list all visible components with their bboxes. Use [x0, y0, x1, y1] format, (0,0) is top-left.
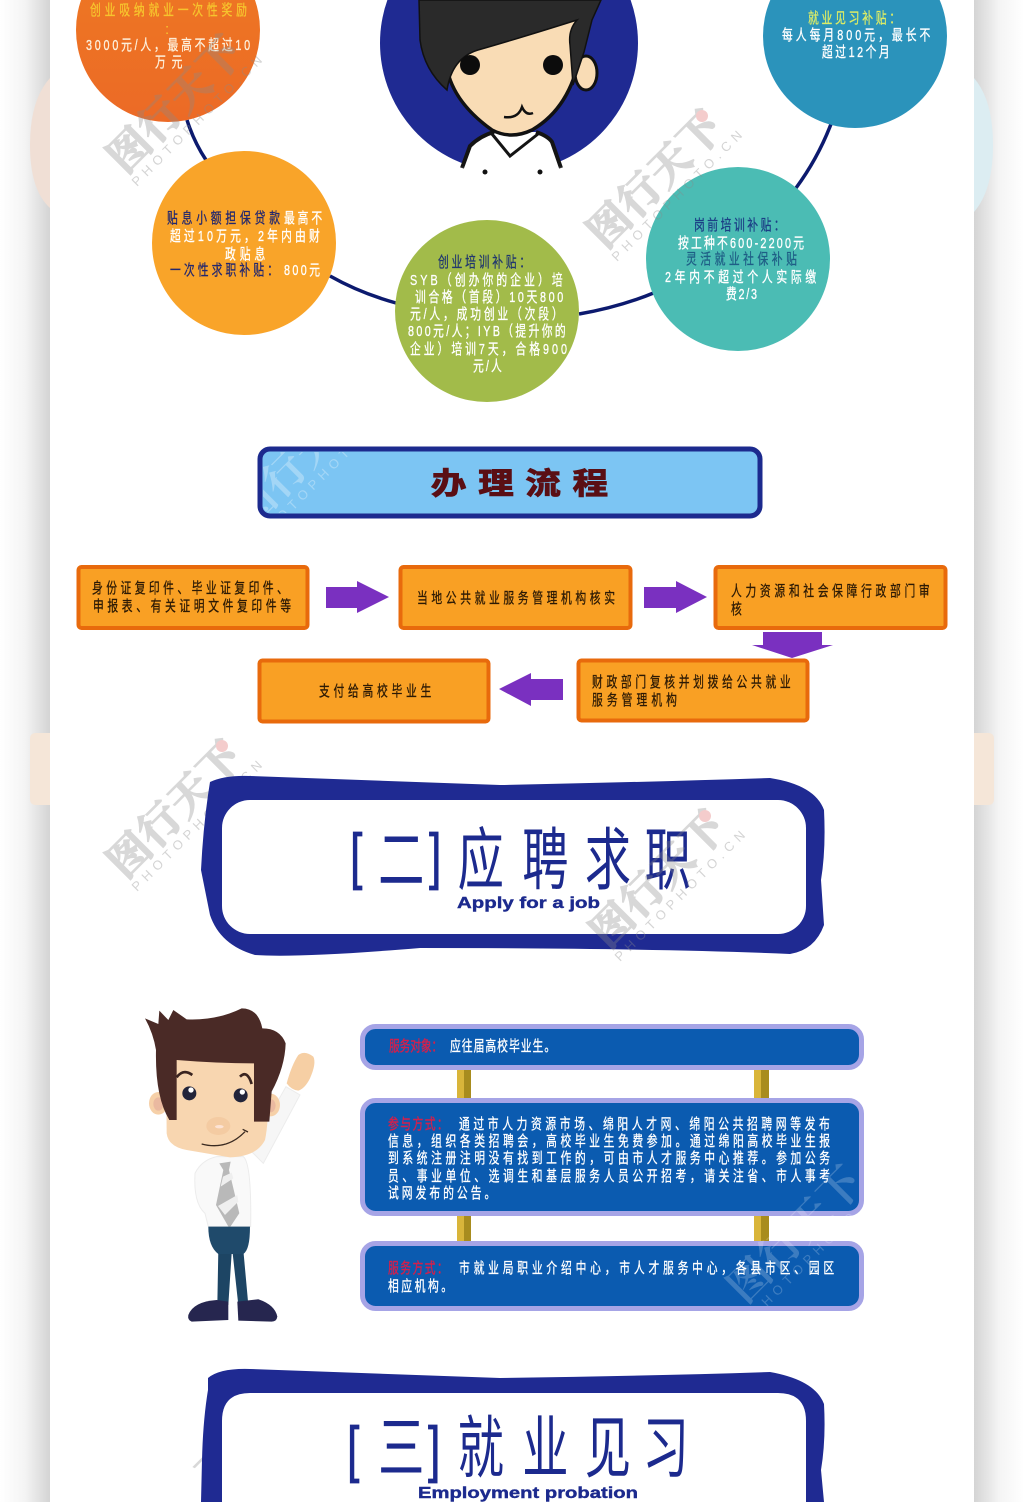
watermark: left of section two: PHOTOPHOTO.CN: [129, 758, 265, 894]
process box: human resources review: [716, 567, 946, 628]
circle: pre-job training subsidy: 费2/3: [726, 285, 757, 302]
watermark: over section two frame: PHOTOPHOTO.CN: [612, 828, 748, 964]
info panel: participation method: 到系统注册注明没有找到工作的，可由市人才服务中心推荐。参加公务: [388, 1149, 830, 1166]
arrow: step two to three: [644, 581, 707, 613]
section frame: apply for a job: 二应聘求职: [378, 823, 691, 899]
right side shadow with ghost shapes: [974, 0, 1024, 1502]
arrow: step four to five: [499, 673, 563, 706]
info panel: service target: 应往届高校毕业生。: [450, 1037, 555, 1054]
process box: payment: 支付给高校毕业生: [319, 682, 431, 699]
circle: entrepreneurship training subsidy: 训合格（首段）10天800: [415, 288, 563, 305]
process box: finance department: [578, 660, 808, 720]
info panel: participation method: 员、事业单位、选调生和基层服务人员公开招考，请关注省、市人事考: [388, 1167, 830, 1184]
info panel: service channels: 相应机构。: [388, 1277, 452, 1294]
circle: guaranteed loan and job-seeking subsidy: 一次性求职补贴：: [170, 261, 278, 278]
circle: entrepreneurship training subsidy: 创业培训补贴：: [438, 253, 530, 270]
section frame: employment probation: 三就业见习: [378, 1411, 689, 1487]
watermark: bottom left: 下: [182, 1426, 255, 1499]
process box: human resources review: 核: [731, 600, 742, 617]
watermark: upper middle: 图行天下: [572, 96, 735, 259]
watermark: over section two frame: 图行天下: [575, 796, 738, 959]
info panel: participation method: [362, 1100, 862, 1214]
process box: finance department: 财政部门复核并划拨给公共就业: [592, 673, 791, 690]
watermark: upper left: PHOTOPHOTO.CN: [129, 53, 265, 189]
circle: guaranteed loan and job-seeking subsidy: 贴息小额担保贷款: [167, 209, 280, 226]
section banner: process: 办理流程: [431, 467, 608, 500]
arrow: step one to two: [326, 581, 389, 613]
circle: one-time employment reward: 万元: [155, 53, 182, 70]
process box: documents: 申报表、有关证明文件复印件等: [93, 597, 291, 614]
circle: internship subsidy: 超过12个月: [822, 43, 890, 60]
connecting arc lines: [187, 120, 831, 314]
circle: one-time employment reward: [76, 0, 260, 122]
section frame: apply for a job: Apply for a job: [457, 895, 600, 912]
process box: verification: [400, 567, 630, 628]
section banner: process: [260, 449, 760, 516]
circle: pre-job training subsidy: 2年内不超过个人实际缴: [665, 268, 816, 285]
process box: payment: [260, 660, 488, 722]
circle: internship subsidy: [763, 0, 947, 128]
section frame: apply for a job: [201, 776, 825, 956]
process box: human resources review: 人力资源和社会保障行政部门审: [731, 582, 930, 599]
circle: one-time employment reward: 3000元/人，最高不超过10: [86, 36, 250, 53]
arrow: step three to four: [752, 632, 833, 658]
process box: documents: [78, 567, 308, 628]
section frame: employment probation: [201, 1369, 825, 1502]
circle: guaranteed loan and job-seeking subsidy: 政贴息: [225, 245, 265, 262]
circle: pre-job training subsidy: [646, 167, 830, 351]
left side shadow with ghost shapes: [0, 0, 50, 1502]
info panel: participation method: 信息，组织各类招聘会，高校毕业生免费参加。通过绵阳高校毕业生报: [388, 1132, 830, 1149]
info panel: service target: [362, 1026, 862, 1068]
watermark: over banner: PHOTOPHOTO.CN: [254, 408, 390, 544]
circle: pre-job training subsidy: 岗前培训补贴：: [694, 216, 785, 233]
watermark: over info panels: PHOTOPHOTO.CN: [749, 1183, 885, 1319]
circle: entrepreneurship training subsidy: SYB（创办你的企业）培: [410, 271, 563, 288]
watermark: upper left: 图行天下: [92, 21, 255, 184]
info panel: service target: 服务对象：: [389, 1037, 442, 1054]
info panel: service channels: 服务方式：: [388, 1259, 448, 1276]
info panel: service channels: [362, 1244, 862, 1308]
circle: entrepreneurship training subsidy: 企业）培训7天，合格900: [410, 340, 567, 357]
section frame: employment probation: [: [347, 1415, 359, 1484]
circle: entrepreneurship training subsidy: [395, 220, 579, 402]
icon: cartoon businessman waving: [145, 1008, 314, 1322]
connector posts between info panels: [457, 1067, 769, 1243]
info panel: service channels: 市就业局职业介绍中心，市人才服务中心，各县市区、园区: [459, 1259, 834, 1276]
circle: one-time employment reward: 创业吸纳就业一次性奖励: [90, 1, 247, 18]
process box: verification: 当地公共就业服务管理机构核实: [417, 589, 615, 606]
section frame: employment probation: ]: [428, 1415, 440, 1484]
watermark: left of section two: 图行天下: [92, 726, 255, 889]
info panel: participation method: 通过市人力资源市场、绵阳人才网、绵阳公共招聘网等发布: [459, 1115, 830, 1132]
circle: pre-job training subsidy: 按工种不600-2200元: [678, 234, 804, 251]
circle: entrepreneurship training subsidy: 元/人，成功创业（次段）: [410, 305, 563, 322]
circle: guaranteed loan and job-seeking subsidy: [152, 151, 336, 335]
process box: finance department: 服务管理机构: [592, 691, 677, 708]
circle: internship subsidy: 就业见习补贴：: [808, 9, 900, 26]
watermark: over info panels: 图行天下: [712, 1151, 875, 1314]
section frame: employment probation: Employment probation: [418, 1485, 638, 1502]
watermark: upper middle: PHOTOPHOTO.CN: [609, 128, 745, 264]
watermark: over banner: [263, 452, 348, 513]
circle: guaranteed loan and job-seeking subsidy: 最高不: [284, 209, 322, 226]
circle: pre-job training subsidy: 灵活就业社保补贴: [686, 250, 797, 267]
watermark: bottom left: .CN: [226, 1458, 265, 1497]
circle: guaranteed loan and job-seeking subsidy: 800元: [284, 261, 320, 278]
section frame: apply for a job: [: [350, 822, 362, 891]
circle: entrepreneurship training subsidy: 元/人: [473, 357, 502, 374]
process box: documents: 身份证复印件、毕业证复印件、: [92, 579, 288, 596]
watermark: over banner: 图行天下: [217, 376, 380, 539]
circle: guaranteed loan and job-seeking subsidy: 超过10万元，2年内由财: [170, 227, 320, 244]
info panel: participation method: 参与方式：: [388, 1115, 448, 1132]
icon: cartoon boy in navy circle: [380, 0, 638, 180]
info panel: participation method: 试网发布的公告。: [388, 1184, 495, 1201]
circle: entrepreneurship training subsidy: 800元/人；IYB（提升你的: [408, 322, 566, 341]
circle: one-time employment reward: :: [165, 21, 169, 38]
section frame: apply for a job: ]: [429, 822, 441, 891]
circle: internship subsidy: 每人每月800元，最长不: [782, 26, 930, 43]
